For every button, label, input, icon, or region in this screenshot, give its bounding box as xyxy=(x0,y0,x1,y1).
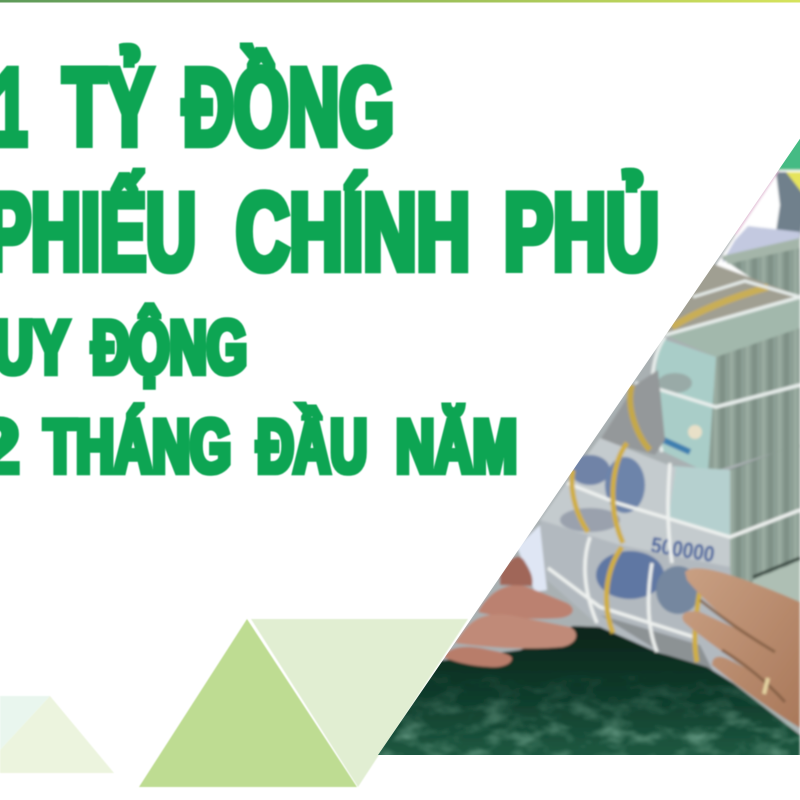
yellow rubber band left xyxy=(630,385,650,450)
yellow bands lower stacks xyxy=(572,443,700,662)
string wrap on second stack xyxy=(635,297,800,452)
title lines 3 and 4: ĐẦU xyxy=(257,404,367,489)
title lines 1 and 2: PHỦ xyxy=(504,171,659,294)
yellow corner triangle xyxy=(785,170,800,194)
pale mint triangle xyxy=(0,696,50,750)
top stack of notes xyxy=(720,246,800,295)
title lines 1 and 2: TỶ xyxy=(63,46,153,169)
photo background xyxy=(442,232,800,736)
finger one xyxy=(478,585,573,619)
stack divider shadow xyxy=(731,466,739,470)
table surface xyxy=(370,626,800,760)
knuckle xyxy=(500,557,533,586)
mid green triangle xyxy=(139,619,357,787)
finger shading xyxy=(700,600,785,702)
white patch behind stacks xyxy=(715,168,800,278)
title lines 1 and 2 xyxy=(0,46,659,294)
finger two xyxy=(455,614,576,648)
title lines 3 and 4 xyxy=(0,305,517,489)
pink edge line xyxy=(735,170,778,234)
photo: hands on stacks of banknotes xyxy=(370,125,800,760)
title lines 1 and 2: ĐỒNG xyxy=(183,46,394,169)
title xyxy=(0,46,659,489)
second stack: teal note face xyxy=(656,340,716,469)
right hand xyxy=(682,568,800,728)
string xyxy=(693,281,800,297)
third stack: blue and white note face xyxy=(540,438,730,567)
top accent bar xyxy=(0,0,800,2)
left hand xyxy=(443,557,576,667)
finger three xyxy=(443,647,512,667)
second stack: top face xyxy=(665,297,800,357)
decorative triangles: centre xyxy=(139,619,468,787)
marble veining xyxy=(378,676,800,755)
title lines 3 and 4: THÁNG xyxy=(44,404,231,489)
pale green triangle xyxy=(0,696,114,773)
lower divider xyxy=(753,558,800,577)
title lines 3 and 4: NĂM xyxy=(396,404,517,489)
dark background shape xyxy=(776,172,800,240)
third stack: striped side xyxy=(730,443,800,600)
wedding ring xyxy=(764,678,768,694)
printed denomination, right: 500000 xyxy=(649,532,716,567)
title lines 1 and 2: CHÍNH xyxy=(236,171,470,294)
light green parallelogram xyxy=(251,619,468,787)
third stack: pale note face xyxy=(668,466,730,537)
blue print xyxy=(570,455,610,485)
title lines 3 and 4: ĐỘNG xyxy=(92,305,247,390)
decorative triangles: bottom left xyxy=(0,696,114,773)
left worn notes xyxy=(600,370,665,455)
green corner triangle xyxy=(778,138,800,172)
lavender background strip xyxy=(722,226,800,262)
string wrap on lower stacks xyxy=(548,463,800,652)
fourth stack: note face xyxy=(540,520,735,683)
printed denomination, left: 00000 xyxy=(541,521,596,560)
second stack: striped side xyxy=(708,328,800,473)
rubber band xyxy=(672,287,768,327)
note shape detail xyxy=(658,373,692,393)
second stack: upper packed face xyxy=(668,264,792,333)
pale wrapper behind xyxy=(517,525,547,592)
